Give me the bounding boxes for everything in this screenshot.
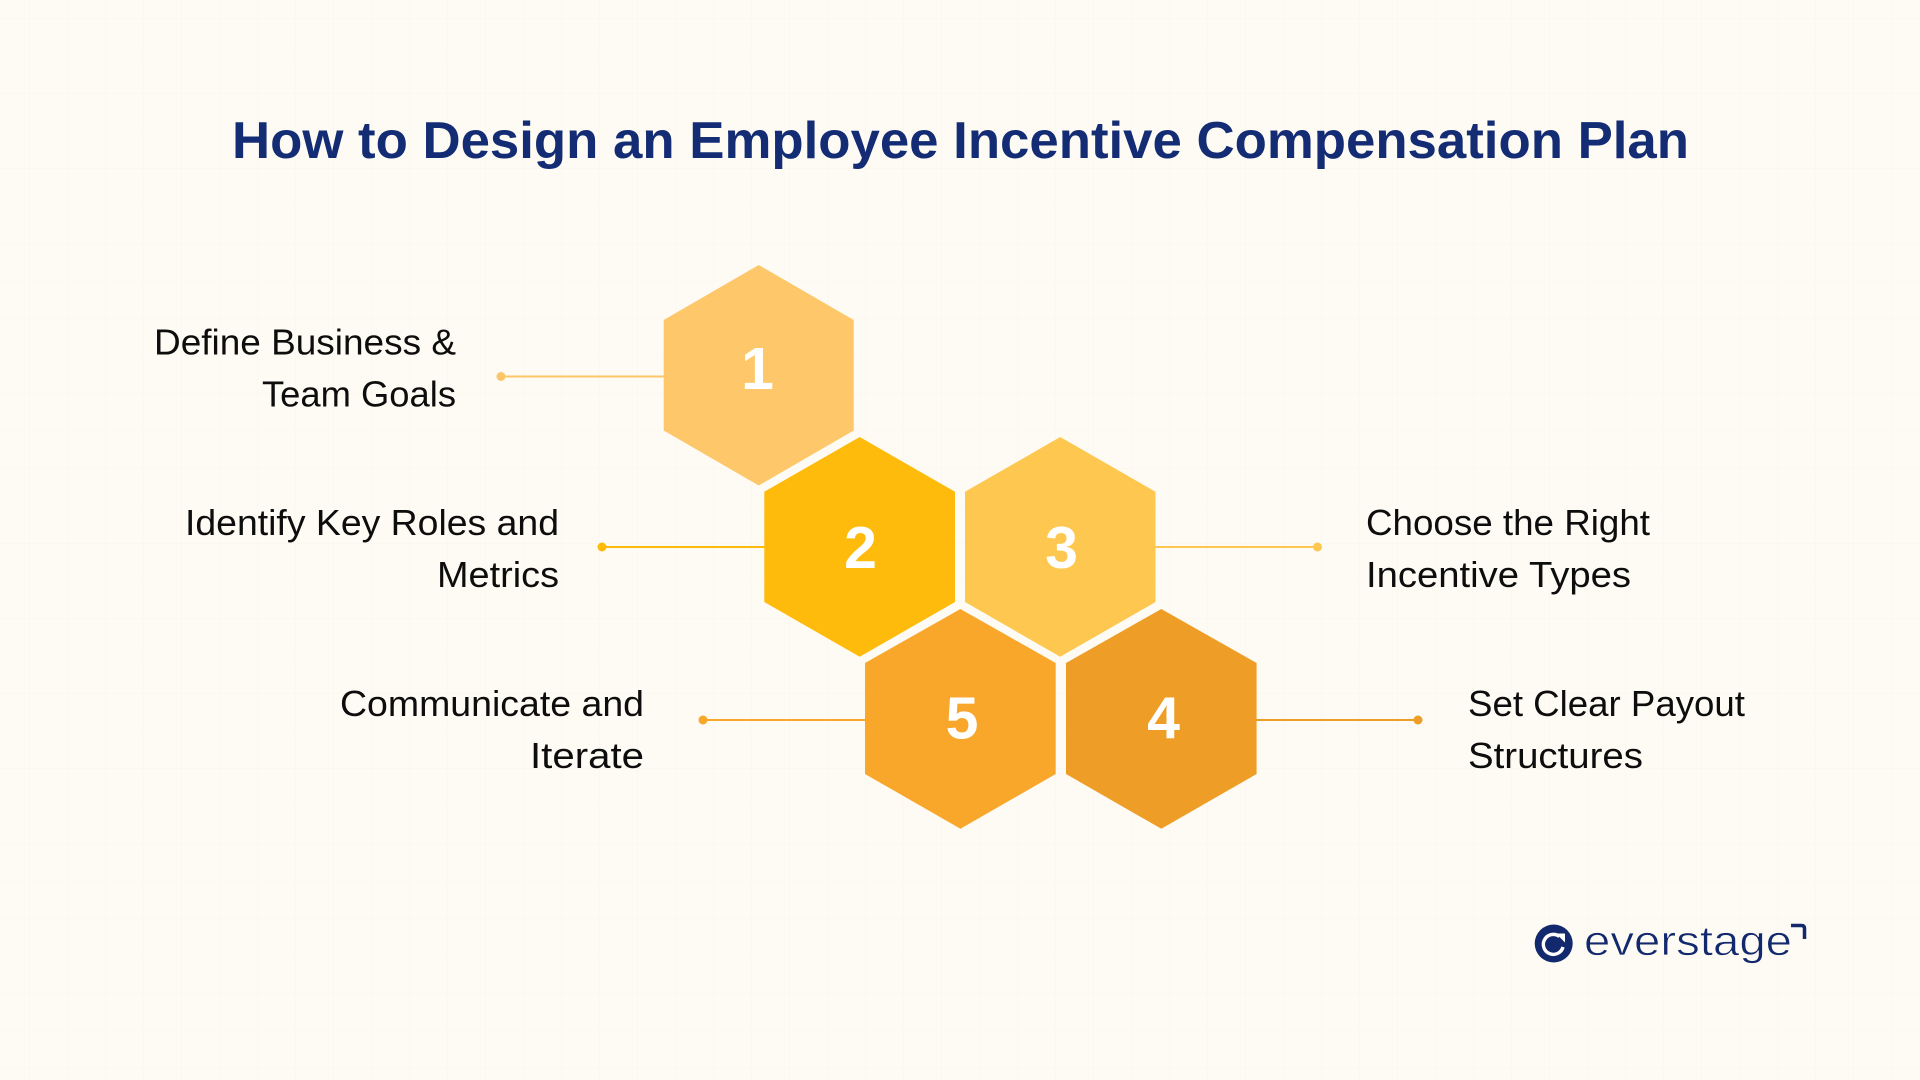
step 2 label: Identify Key Roles and (185, 502, 559, 543)
step 1 hexagon (664, 265, 854, 486)
step 1 label (154, 322, 456, 414)
step 3: label, connector and hexagon (965, 437, 1650, 657)
step 2 label: Metrics (437, 554, 559, 595)
step 2 connector (598, 542, 766, 552)
step 2 number: 2 (844, 515, 877, 581)
step 1: label, connector and hexagon (154, 265, 854, 486)
step 3 label: Incentive Types (1366, 554, 1631, 595)
step 5 label: Communicate and (340, 683, 644, 724)
step 5 hexagon (865, 609, 1056, 829)
step 2: label, connector and hexagon (185, 437, 955, 657)
step 5: label, connector and hexagon (340, 609, 1056, 829)
step 1 label: Define Business & (154, 322, 456, 362)
step 3 number: 3 (1045, 515, 1078, 581)
step 5 connector (698, 716, 867, 724)
step 4 label: Structures (1468, 735, 1643, 776)
icon: logo mark (1535, 924, 1573, 962)
step 4 label: Set Clear Payout (1468, 683, 1745, 724)
step 5 number: 5 (946, 686, 978, 752)
step 4 number: 4 (1147, 686, 1180, 752)
step 1 label: Team Goals (262, 374, 456, 414)
step 4 hexagon (1066, 609, 1257, 829)
step 2 hexagon (764, 437, 955, 657)
step 5 label: Iterate (530, 735, 644, 776)
step 2 label (185, 502, 559, 595)
step 1 number: 1 (741, 336, 774, 402)
step 4: label, connector and hexagon (1066, 609, 1745, 829)
step 3 connector (1154, 542, 1322, 552)
everstage logo (1535, 917, 1804, 964)
title: How to Design an Employee Incentive Compensation Plan (232, 112, 1689, 170)
step 3 label (1366, 502, 1650, 595)
logo corner tick (1791, 926, 1804, 939)
step 5 label (340, 683, 644, 776)
step 4 label (1468, 683, 1745, 776)
step 3 hexagon (965, 437, 1156, 657)
logo wordmark: everstage (1584, 917, 1792, 964)
step 1 connector (496, 372, 666, 381)
step 4 connector (1254, 716, 1422, 724)
step 3 label: Choose the Right (1366, 502, 1650, 543)
